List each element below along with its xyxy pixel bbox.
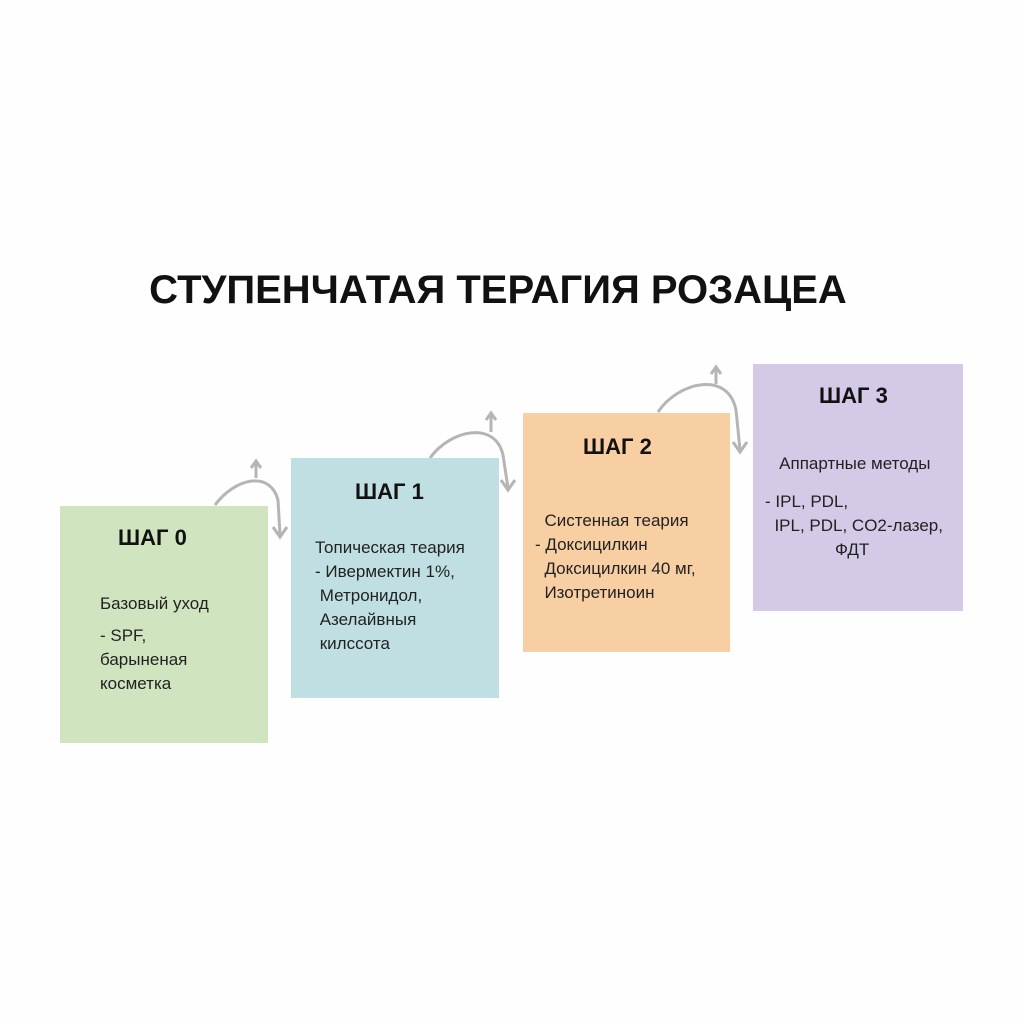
text step 2: - Доксицилкин (535, 535, 648, 554)
text step 1: Метронидол, (320, 586, 422, 605)
text step 2 (535, 511, 696, 602)
text step 0: барыненая (100, 650, 187, 669)
panel: step 1 (291, 458, 499, 698)
text step 3: - IPL, PDL, (765, 492, 848, 511)
heading step 3: ШАГ 3 (819, 383, 888, 408)
text step 2: Изотретиноин (544, 583, 654, 602)
text step 3: IPL, PDL, CO2-лазер, (774, 516, 943, 535)
text step 3: ФДТ (835, 540, 869, 559)
panel: step 2 (523, 413, 730, 652)
heading step 2: ШАГ 2 (583, 434, 652, 459)
heading step 1: ШАГ 1 (355, 479, 424, 504)
text step 1: - Ивермектин 1%, (315, 562, 455, 581)
text step 1: Топическая теария (315, 538, 465, 557)
text step 3: Аппартные методы (779, 454, 930, 473)
heading step 0: ШАГ 0 (118, 525, 187, 550)
text step 0: косметка (100, 674, 171, 693)
text step 1 (315, 538, 465, 653)
text step 0: Базовый уход (100, 594, 209, 613)
text step 2: Доксицилкин 40 мг, (544, 559, 696, 578)
arrow: step 1 to 2 (430, 413, 515, 490)
title: СТУПЕНЧАТАЯ ТЕРАГИЯ РОЗАЦЕА (149, 268, 847, 312)
text step 1: килссота (320, 634, 390, 653)
panel: step 3 (753, 364, 963, 611)
panel: step 0 (60, 506, 268, 743)
text step 0 (100, 594, 209, 693)
arrow: step 2 to 3 (658, 367, 747, 452)
arrow: step 0 to 1 (215, 461, 287, 537)
text step 3 (765, 454, 943, 559)
text step 1: Азелайвныя (320, 610, 416, 629)
text step 2: Систенная теария (544, 511, 689, 530)
text step 0: - SPF, (100, 626, 146, 645)
